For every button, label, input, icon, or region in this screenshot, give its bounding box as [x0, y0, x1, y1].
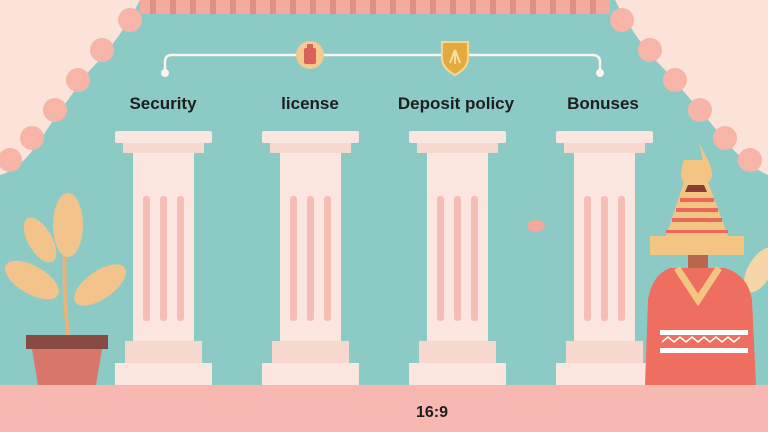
pillar: Security	[115, 131, 212, 385]
pillar: license	[262, 131, 359, 385]
plant	[0, 193, 133, 385]
label: Deposit policy: Deposit policy	[398, 94, 515, 113]
pillar: Bonuses	[556, 131, 653, 385]
top stripe banner	[140, 0, 610, 14]
label: Security: Security	[129, 94, 197, 113]
connector line	[161, 55, 604, 77]
icon: shield	[442, 42, 468, 75]
leaves decoration	[527, 220, 768, 298]
footer label: 16:9	[416, 404, 448, 421]
label: Bonuses: Bonuses	[567, 94, 639, 113]
curtain right	[610, 0, 768, 175]
curtain left	[0, 0, 142, 175]
floor	[0, 385, 768, 432]
icon: license badge	[296, 41, 324, 69]
pillar: Deposit policy	[409, 131, 506, 385]
label: license: license	[281, 94, 339, 113]
person	[645, 143, 756, 385]
